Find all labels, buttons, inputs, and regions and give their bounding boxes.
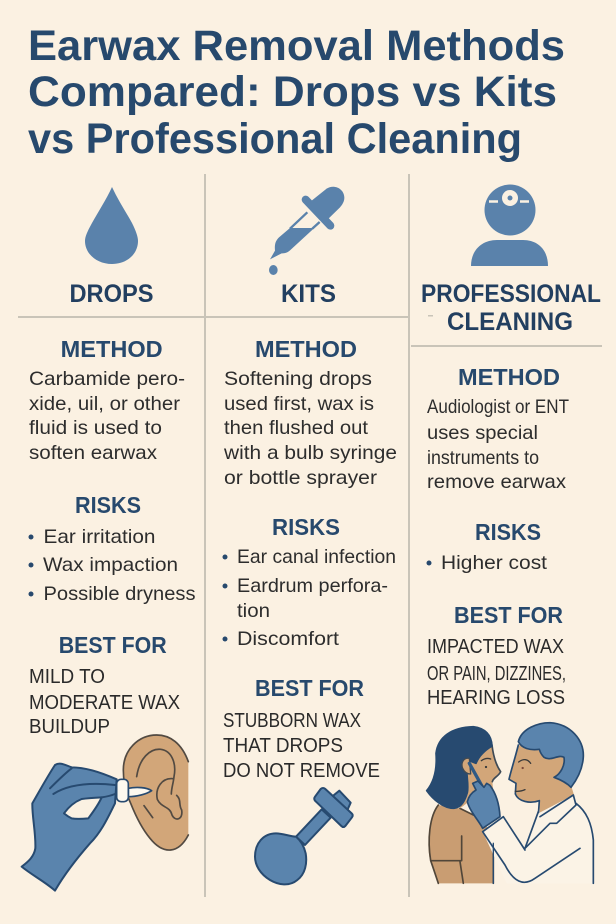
best for text: MODERATE WAX	[29, 692, 180, 714]
best for heading: BEST FOR	[255, 675, 364, 701]
method text: used first, wax is	[224, 393, 374, 415]
heading: professional cleaning: CLEANING	[447, 308, 573, 336]
title: Compared: Drops vs Kits	[28, 68, 557, 116]
doctor coat	[483, 795, 593, 883]
risks list: Eardrum perfora-	[237, 575, 388, 597]
risks heading: RISKS	[272, 514, 340, 540]
ear	[123, 735, 188, 850]
panel: kits	[222, 187, 397, 884]
method text: fluid is used to	[29, 417, 162, 439]
doctor hair	[518, 723, 583, 787]
risks list: Possible dryness	[44, 583, 196, 605]
risks list: Wax impaction	[43, 554, 178, 576]
icon: water drop	[85, 187, 138, 264]
risks list: Higher cost	[441, 552, 548, 574]
method text: or bottle sprayer	[224, 467, 378, 489]
best for text	[29, 666, 180, 738]
best for heading: BEST FOR	[454, 602, 563, 628]
heading: professional cleaning: PROFESSIONAL	[421, 280, 601, 308]
best for text: IMPACTED WAX	[427, 636, 564, 658]
patient ear	[462, 758, 471, 774]
method text	[427, 396, 569, 493]
patient body	[429, 805, 493, 883]
risks heading: RISKS	[75, 492, 141, 518]
method text: with a bulb syringe	[223, 442, 397, 464]
risks list: tion	[237, 600, 270, 622]
method text: Carbamide pero-	[29, 368, 185, 390]
instrument	[469, 763, 486, 793]
best for text: HEARING LOSS	[427, 687, 565, 709]
method text	[29, 368, 185, 464]
method text: Softening drops	[224, 368, 372, 390]
method text: then flushed out	[224, 417, 369, 439]
risks list: Ear irritation	[44, 526, 156, 548]
method heading: METHOD	[255, 336, 357, 362]
heading: professional cleaning	[421, 280, 601, 336]
risks list	[28, 526, 196, 605]
risks list: Ear canal infection	[237, 546, 396, 568]
icon: dropper	[269, 187, 344, 275]
patient hair	[427, 727, 492, 808]
method text: Audiologist or ENT	[427, 396, 569, 418]
panel: drops	[22, 187, 196, 891]
best for text: BUILDUP	[29, 716, 110, 738]
method heading: METHOD	[61, 336, 163, 362]
heading: drops: DROPS	[70, 280, 154, 308]
title: Earwax Removal Methods	[28, 22, 565, 70]
best for text	[223, 710, 380, 782]
heading: kits: KITS	[281, 280, 336, 308]
risks heading: RISKS	[475, 519, 541, 545]
method text: soften earwax	[29, 442, 157, 464]
best for text: MILD TO	[29, 666, 105, 688]
illustration: gloved hand at ear	[22, 735, 188, 891]
glove	[22, 764, 117, 891]
method heading: METHOD	[458, 364, 560, 390]
risks list: Discomfort	[237, 628, 340, 650]
best for text: OR PAIN, DIZZINES,	[427, 663, 566, 685]
patient face	[460, 745, 501, 808]
panel: professional cleaning	[421, 184, 601, 883]
doctor face	[509, 745, 574, 816]
best for text	[427, 636, 566, 709]
method text: uses special	[427, 422, 538, 444]
swab	[128, 787, 152, 797]
glove	[467, 781, 500, 828]
title	[28, 22, 565, 163]
icon: doctor with head mirror	[471, 184, 548, 266]
illustration: doctor examining patient ear	[427, 723, 593, 883]
risks list	[222, 546, 396, 650]
method text: xide, uil, or other	[29, 393, 181, 415]
method text: remove earwax	[427, 471, 566, 493]
best for heading: BEST FOR	[59, 632, 167, 658]
best for text: DO NOT REMOVE	[223, 760, 380, 782]
method text	[223, 368, 397, 489]
illustration: bulb syringe	[255, 788, 353, 884]
method text: instruments to	[427, 447, 539, 469]
title: vs Professional Cleaning	[28, 115, 522, 163]
best for text: STUBBORN WAX	[223, 710, 361, 732]
best for text: THAT DROPS	[223, 735, 343, 757]
